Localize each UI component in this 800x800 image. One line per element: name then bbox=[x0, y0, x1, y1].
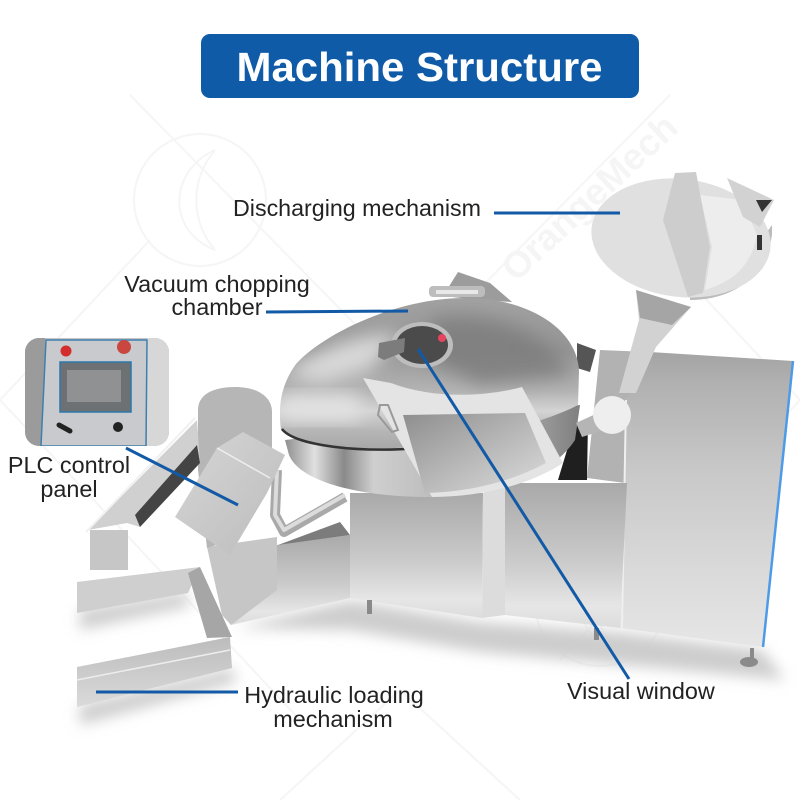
label: hydraulic loading mechanism: Hydraulic loading bbox=[244, 682, 424, 708]
label: PLC control panel: PLC control bbox=[8, 452, 130, 478]
title banner: Machine Structure bbox=[236, 44, 602, 90]
label: hydraulic loading mechanism: mechanism bbox=[273, 706, 393, 732]
bowl bbox=[285, 405, 580, 497]
panel face bbox=[41, 340, 147, 446]
conveyor block bbox=[90, 530, 128, 570]
top hatch bbox=[429, 286, 485, 297]
floor shadow bbox=[80, 592, 785, 725]
red buttons bbox=[60, 346, 72, 356]
discharge arm bbox=[576, 290, 691, 437]
frame leg bbox=[188, 567, 232, 638]
leader line: vacuum chopping chamber bbox=[266, 311, 408, 312]
label: visual window: Visual window bbox=[567, 678, 715, 704]
leader line: hydraulic loading mechanism bbox=[96, 690, 238, 694]
hydraulic pipe bbox=[275, 470, 345, 532]
label: vacuum chopping chamber: chamber bbox=[171, 294, 263, 320]
leader line: discharging mechanism bbox=[494, 212, 620, 214]
dark gap behind dome bbox=[558, 343, 596, 480]
leveling feet bbox=[367, 600, 758, 667]
lower base panels bbox=[207, 483, 627, 628]
inset: PLC control panel photo bbox=[25, 338, 169, 446]
dome lid bbox=[280, 298, 579, 450]
foot beam bbox=[77, 637, 232, 707]
loading cover bbox=[175, 432, 285, 555]
label: discharging mechanism: Discharging mechanism bbox=[233, 195, 481, 221]
touch screen bbox=[60, 362, 131, 412]
cabinet bbox=[587, 350, 793, 647]
rear hatch fin bbox=[443, 272, 512, 302]
machine bbox=[77, 168, 793, 707]
chute bbox=[363, 378, 563, 497]
selector knobs bbox=[59, 425, 70, 431]
label: PLC control panel: panel bbox=[40, 476, 98, 502]
leader line: PLC control panel bbox=[126, 448, 238, 505]
label: vacuum chopping chamber: Vacuum chopping bbox=[124, 271, 310, 297]
visual window bbox=[378, 322, 453, 368]
discharge disc bbox=[584, 168, 778, 308]
conveyor pillar bbox=[198, 387, 272, 548]
title banner bbox=[201, 34, 639, 98]
leader line: visual window bbox=[418, 349, 629, 679]
watermark: OrangeMech bbox=[493, 106, 685, 289]
base plate bbox=[77, 567, 200, 613]
conveyor rail bbox=[86, 418, 200, 532]
